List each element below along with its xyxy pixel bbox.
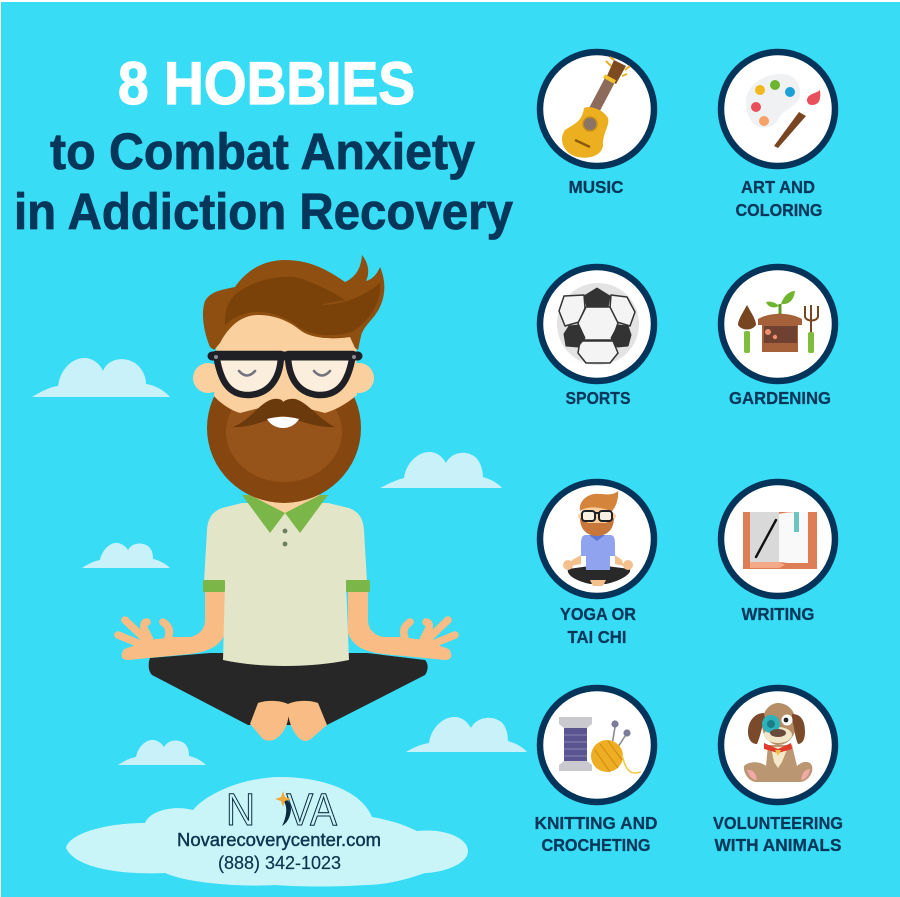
title: to Combat Anxiety [50, 123, 476, 180]
neck [250, 495, 320, 513]
label: WITH ANIMALS [714, 835, 842, 855]
face [214, 310, 357, 413]
hobby: writing [721, 482, 835, 624]
ears [193, 363, 374, 393]
icon: plant pot and tools [738, 291, 818, 353]
label: TAI CHI [568, 627, 626, 647]
shirt [204, 503, 367, 666]
circle [540, 688, 654, 802]
hair [203, 255, 384, 350]
phone number: (888) 342-1023 [218, 852, 341, 873]
icon: guitar [562, 57, 630, 158]
circle [540, 482, 654, 596]
label: WRITING [742, 604, 814, 624]
label: KNITTING AND [534, 813, 658, 833]
illustration: meditating man [118, 255, 455, 741]
label: MUSIC [568, 177, 624, 197]
mouth [267, 417, 299, 428]
cloud: lower right [406, 717, 527, 752]
label: YOGA OR [560, 604, 636, 624]
circle [540, 267, 654, 381]
title [14, 50, 514, 240]
website: Novarecoverycenter.com [177, 829, 381, 850]
title: in Addiction Recovery [14, 183, 514, 240]
beard [207, 353, 361, 503]
collar [242, 495, 328, 533]
label: GARDENING [729, 388, 831, 408]
hobby: art and coloring [721, 52, 835, 220]
left arm and hand [118, 590, 225, 660]
label [736, 177, 822, 220]
title: 8 HOBBIES [118, 50, 415, 117]
sleeve cuffs [203, 580, 370, 592]
moustache [233, 399, 335, 427]
hobby: yoga or tai chi [540, 482, 654, 647]
cloud: upper left [32, 358, 170, 397]
label [534, 813, 658, 855]
icon: palette and brush [746, 74, 820, 148]
hobby: sports [540, 267, 654, 408]
shirt buttons [283, 529, 287, 546]
right arm and hand [348, 590, 455, 660]
icon: small meditating man [563, 491, 633, 586]
label: VOLUNTEERING [713, 813, 843, 833]
icon: puppy [744, 703, 812, 782]
label: COLORING [736, 200, 822, 220]
circle [540, 52, 654, 166]
label: SPORTS [566, 388, 630, 408]
cloud: middle right [380, 452, 502, 488]
glasses [212, 354, 358, 395]
circle [721, 688, 835, 802]
icon: open book and pen [743, 512, 817, 569]
footer cloud with contact details [66, 777, 468, 886]
cloud: small left [82, 543, 170, 568]
cloud: small bottom left [118, 740, 206, 765]
feet [250, 701, 327, 741]
label: ART AND [741, 177, 815, 197]
label [713, 813, 843, 855]
circle [721, 52, 835, 166]
legs [149, 653, 428, 725]
circle [721, 267, 835, 381]
hobby: gardening [721, 267, 835, 408]
circle [721, 482, 835, 596]
hobby: volunteering with animals [713, 688, 843, 855]
cloud shape [66, 777, 468, 886]
icon: soccer ball [557, 283, 639, 365]
hobby: music [540, 52, 654, 197]
icon: spool and yarn [559, 717, 641, 773]
label: CROCHETING [542, 835, 650, 855]
hobby: knitting and crocheting [534, 688, 658, 855]
label [560, 604, 636, 647]
logo: Nova: NOVA [226, 784, 337, 835]
